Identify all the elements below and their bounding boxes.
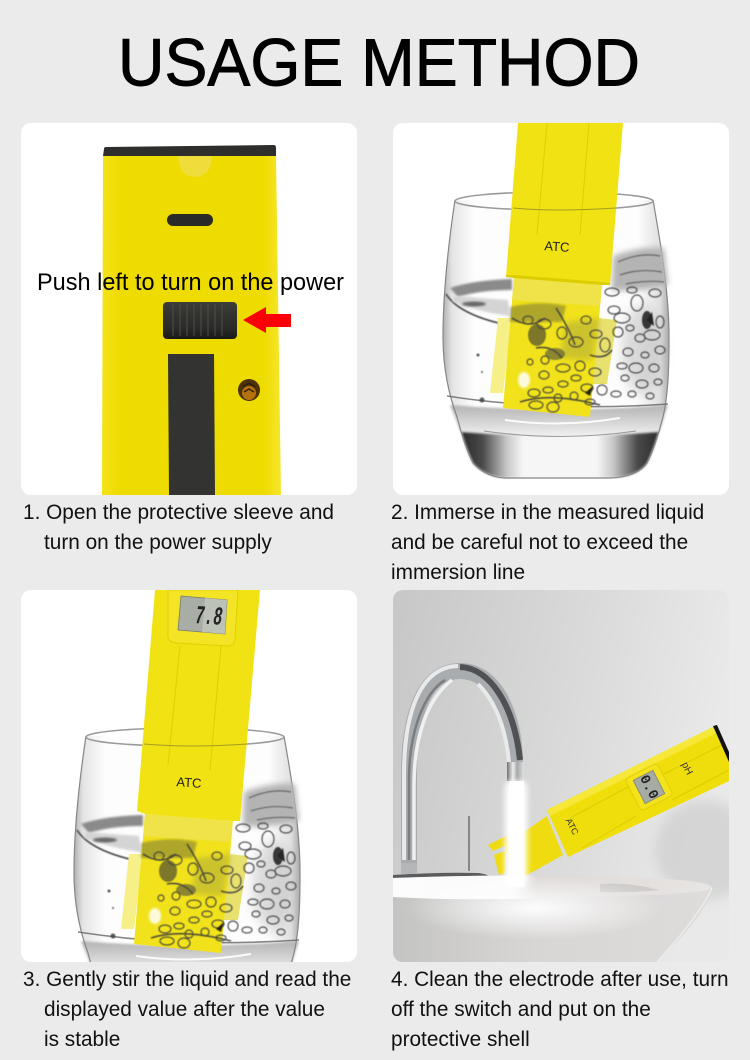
glass of water	[73, 728, 302, 962]
panel: step 4 clean under tap	[393, 590, 750, 962]
pen in water	[490, 278, 617, 417]
bubbles	[476, 287, 665, 412]
pen black cap edge	[103, 145, 276, 156]
pen in water	[121, 814, 248, 953]
faucet	[404, 666, 524, 868]
pen held under water	[488, 725, 729, 878]
caption 3: 3. Gently stir the liquid and read the	[23, 968, 351, 991]
pen held under water: ATC	[564, 816, 581, 837]
caption 3: is stable	[44, 1028, 120, 1051]
push label: Push left to turn on the power	[37, 269, 344, 296]
panel: step 1 power switch	[21, 123, 357, 495]
caption 4: protective shell	[391, 1028, 530, 1051]
running water	[505, 781, 527, 887]
pen upper body: ATC	[176, 774, 202, 791]
LCD display	[178, 596, 227, 634]
pen upper body: ATC	[544, 238, 570, 255]
caption 2: 2. Immerse in the measured liquid	[391, 501, 704, 524]
slide switch	[163, 302, 237, 339]
caption 4: off the switch and put on the	[391, 998, 651, 1021]
panel: step 2 immerse	[393, 123, 729, 495]
title: USAGE METHOD	[118, 26, 640, 100]
faucet base and lever	[393, 816, 491, 878]
pen body	[102, 155, 281, 495]
caption 1: turn on the power supply	[44, 531, 272, 554]
caption 4: 4. Clean the electrode after use, turn	[391, 968, 729, 991]
slot	[167, 214, 213, 226]
LCD display: 7.8	[194, 601, 224, 633]
bubbles	[108, 823, 296, 948]
pen upper body	[137, 590, 260, 821]
caption 3: displayed value after the value	[44, 998, 325, 1021]
pen held under water: pH	[679, 760, 694, 777]
sensor hole	[238, 379, 260, 401]
caption 2: and be careful not to exceed the	[391, 531, 688, 554]
caption 1: 1. Open the protective sleeve and	[23, 501, 334, 524]
glass of water	[443, 192, 669, 478]
clip notch	[178, 156, 212, 177]
soft shade lower right	[655, 799, 729, 901]
panel: step 3 stir and read	[21, 590, 357, 962]
pen upper body	[506, 123, 623, 285]
basin	[393, 875, 712, 962]
pen held under water: 0.0	[635, 773, 661, 802]
caption 2: immersion line	[391, 561, 525, 584]
black electrode bar	[168, 354, 215, 495]
red arrow	[243, 307, 291, 333]
